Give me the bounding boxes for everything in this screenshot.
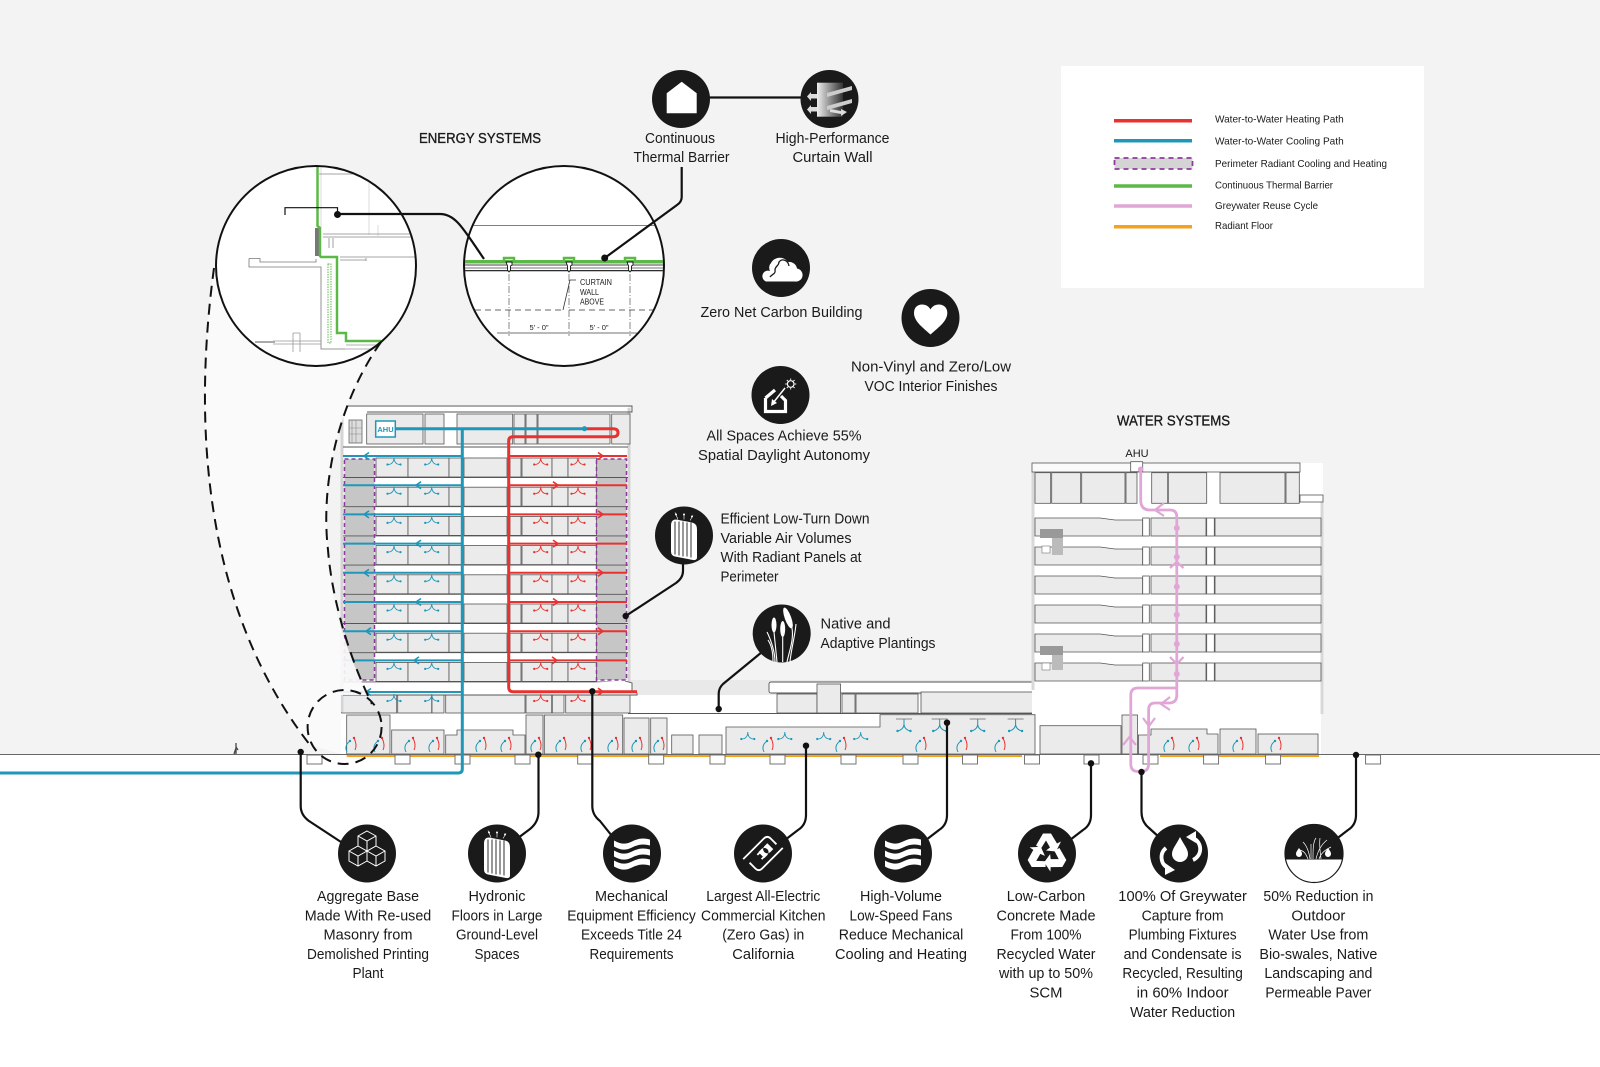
text: greywater capture: Capture from: [1142, 907, 1224, 924]
greywater path nodes: [1138, 466, 1180, 677]
text: greywater capture: [1118, 888, 1247, 1021]
text: outdoor water reduction: 50% Reduction in: [1263, 888, 1373, 905]
middle podium and ground level section: [341, 682, 1321, 754]
text: efficient variable air: [720, 510, 870, 586]
icon: greywater drop and arrows: [1150, 824, 1208, 882]
greywater reuse cycle: [1123, 469, 1184, 772]
left tower section: [342, 405, 637, 712]
text: low-carbon concrete: SCM: [1030, 984, 1062, 1002]
text: continuous thermal barrier: Thermal Barrier: [634, 149, 730, 166]
icon: mechanical air waves: [603, 824, 661, 882]
text: greywater capture: 100% Of Greywater: [1118, 888, 1247, 905]
text: largest all-electric kitchen: Largest All-Electric: [706, 888, 821, 905]
icon: heart: [902, 289, 960, 347]
legend panel: Greywater Reuse Cycle: [1215, 200, 1318, 212]
text: mechanical equipment efficiency: Mechanical: [595, 888, 668, 905]
text: non-vinyl finishes: [851, 358, 1011, 395]
text: greywater capture: Plumbing Fixtures: [1129, 927, 1237, 944]
detail circle: curtain wall plan: 5' - 0": [529, 323, 549, 332]
text: largest all-electric kitchen: (Zero Gas) in: [722, 927, 804, 944]
radiant floor: [347, 755, 1319, 757]
text: high-volume fans: Cooling and Heating: [835, 946, 967, 963]
text: low-carbon concrete: From 100%: [1010, 927, 1082, 944]
text: largest all-electric kitchen: [701, 888, 826, 963]
text: greywater capture: and Condensate is: [1124, 946, 1242, 963]
detail circle: base of wall: [216, 166, 416, 366]
text: outdoor water reduction: Outdoor: [1291, 907, 1345, 924]
text: native and adaptive plantings: Adaptive Plantings: [820, 635, 936, 652]
page background: [0, 0, 1600, 754]
text: aggregate base: Masonry from: [324, 927, 412, 944]
zoom-in highlight cone: [205, 268, 381, 754]
legend panel: Water-to-Water Heating Path: [1215, 114, 1344, 126]
text: largest all-electric kitchen: California: [732, 946, 795, 963]
icon: all-electric plug: [734, 824, 792, 882]
AHU label right tower: AHU: [1125, 448, 1149, 460]
water-to-water cooling path: [0, 421, 584, 773]
text: efficient variable air: With Radiant Panels at: [720, 549, 862, 566]
footings: [307, 755, 1381, 764]
text: aggregate base: [305, 888, 431, 982]
text: outdoor water reduction: Landscaping and: [1264, 965, 1372, 982]
text: largest all-electric kitchen: Commercial Kitchen: [701, 907, 826, 924]
text: high performance curtain wall: High-Performance: [776, 130, 890, 147]
text: outdoor water reduction: Water Use from: [1268, 927, 1368, 944]
detail circle: curtain wall plan: [464, 166, 664, 366]
legend panel: [1061, 66, 1424, 288]
icon: high-volume fan waves: [874, 824, 932, 882]
detail circle: curtain wall plan: WALL: [580, 288, 599, 297]
icon: radiant panel: [655, 506, 713, 564]
legend panel: Radiant Floor: [1215, 220, 1273, 232]
heading: water systems: WATER SYSTEMS: [1117, 412, 1230, 430]
text: aggregate base: Plant: [352, 965, 384, 982]
text: aggregate base: Made With Re-used: [305, 907, 431, 924]
text: spatial daylight autonomy: [698, 428, 870, 464]
legend panel: Water-to-Water Cooling Path: [1215, 136, 1344, 148]
text: hydronic floors: Floors in Large: [452, 907, 542, 924]
text: continuous thermal barrier: Continuous: [645, 130, 715, 147]
icon: high performance curtain wall: [800, 70, 858, 128]
person scale figure: [234, 743, 238, 754]
text: aggregate base: Aggregate Base: [317, 888, 419, 905]
text: efficient variable air: Perimeter: [720, 568, 778, 586]
leader lines: [301, 98, 1356, 842]
water-to-water heating path: [509, 429, 637, 695]
text: native and adaptive plantings: [820, 616, 936, 652]
icon: aggregate cubes: [338, 824, 396, 882]
text: low-carbon concrete: Low-Carbon: [1007, 888, 1085, 905]
cooling heating junction: [582, 426, 587, 431]
text: outdoor water reduction: [1259, 888, 1377, 1002]
legend panel: Perimeter Radiant Cooling and Heating: [1215, 158, 1387, 170]
text: spatial daylight autonomy: Spatial Daylight Autonomy: [698, 447, 870, 464]
heading: energy systems: ENERGY SYSTEMS: [419, 130, 541, 147]
text: hydronic floors: Spaces: [474, 946, 520, 963]
right tower section: [1032, 462, 1323, 714]
leader end dots: [298, 211, 1359, 775]
text: low-carbon concrete: [996, 888, 1096, 1002]
text: high performance curtain wall: Curtain Wall: [792, 149, 872, 166]
icon: continuous thermal barrier house: [652, 70, 710, 128]
text: high performance curtain wall: [776, 130, 890, 166]
text: mechanical equipment efficiency: Requirements: [590, 946, 674, 963]
middle podium background band: [628, 680, 1032, 713]
ground line: [0, 754, 1600, 756]
AHU label left tower: AHU: [377, 425, 394, 434]
text: high-volume fans: Reduce Mechanical: [839, 927, 963, 944]
text: hydronic floors: Hydronic: [468, 888, 526, 905]
text: high-volume fans: Low-Speed Fans: [850, 907, 952, 924]
legend panel: Continuous Thermal Barrier: [1215, 180, 1333, 192]
diffusers, fans and floor air arrows: [346, 719, 1281, 752]
icon: zero net carbon cloud: [752, 239, 810, 297]
text: outdoor water reduction: Bio-swales, Native: [1259, 946, 1377, 963]
text: mechanical equipment efficiency: Equipment Efficiency: [567, 907, 696, 924]
text: efficient variable air: Efficient Low-Turn Down: [720, 510, 870, 528]
text: hydronic floors: Ground-Level: [456, 927, 538, 944]
icon: daylight house: [752, 366, 810, 424]
below-ground area: [0, 754, 1600, 1067]
text: high-volume fans: High-Volume: [860, 888, 942, 905]
text: greywater capture: Water Reduction: [1130, 1004, 1235, 1021]
text: non-vinyl finishes: VOC Interior Finishes: [864, 378, 998, 395]
icon: recycle: [1018, 824, 1076, 882]
text: non-vinyl finishes: Non-Vinyl and Zero/Low: [851, 358, 1011, 376]
text: hydronic floors: [452, 888, 542, 963]
text: high-volume fans: [835, 888, 967, 963]
text: greywater capture: in 60% Indoor: [1137, 984, 1229, 1002]
detail circle: curtain wall plan: 5' - 0": [589, 323, 609, 332]
text: low-carbon concrete: Concrete Made: [996, 907, 1096, 924]
dashed zoom lines: [205, 268, 381, 745]
text: mechanical equipment efficiency: [567, 888, 696, 963]
text: efficient variable air: Variable Air Volumes: [720, 530, 852, 547]
text: mechanical equipment efficiency: Exceeds Title 24: [581, 927, 682, 944]
text: spatial daylight autonomy: All Spaces Achieve 55%: [706, 428, 862, 444]
dashed zoom circle: [308, 690, 382, 764]
text: low-carbon concrete: with up to 50%: [998, 965, 1093, 982]
text: continuous thermal barrier: [634, 130, 730, 166]
detail circle: curtain wall plan: CURTAIN: [580, 278, 612, 287]
icon: native plants: [753, 604, 811, 662]
text: low-carbon concrete: Recycled Water: [996, 946, 1096, 963]
text: native and adaptive plantings: Native and: [820, 616, 890, 632]
text: greywater capture: Recycled, Resulting: [1122, 965, 1243, 982]
text: zero net carbon building: Zero Net Carbon Building: [700, 304, 862, 321]
text: outdoor water reduction: Permeable Paver: [1265, 984, 1371, 1002]
text: aggregate base: Demolished Printing: [307, 946, 429, 963]
icon: hydronic radiator: [468, 824, 526, 882]
icon: bio-swale planting: [1285, 824, 1343, 882]
detail circle: curtain wall plan: ABOVE: [580, 298, 604, 306]
